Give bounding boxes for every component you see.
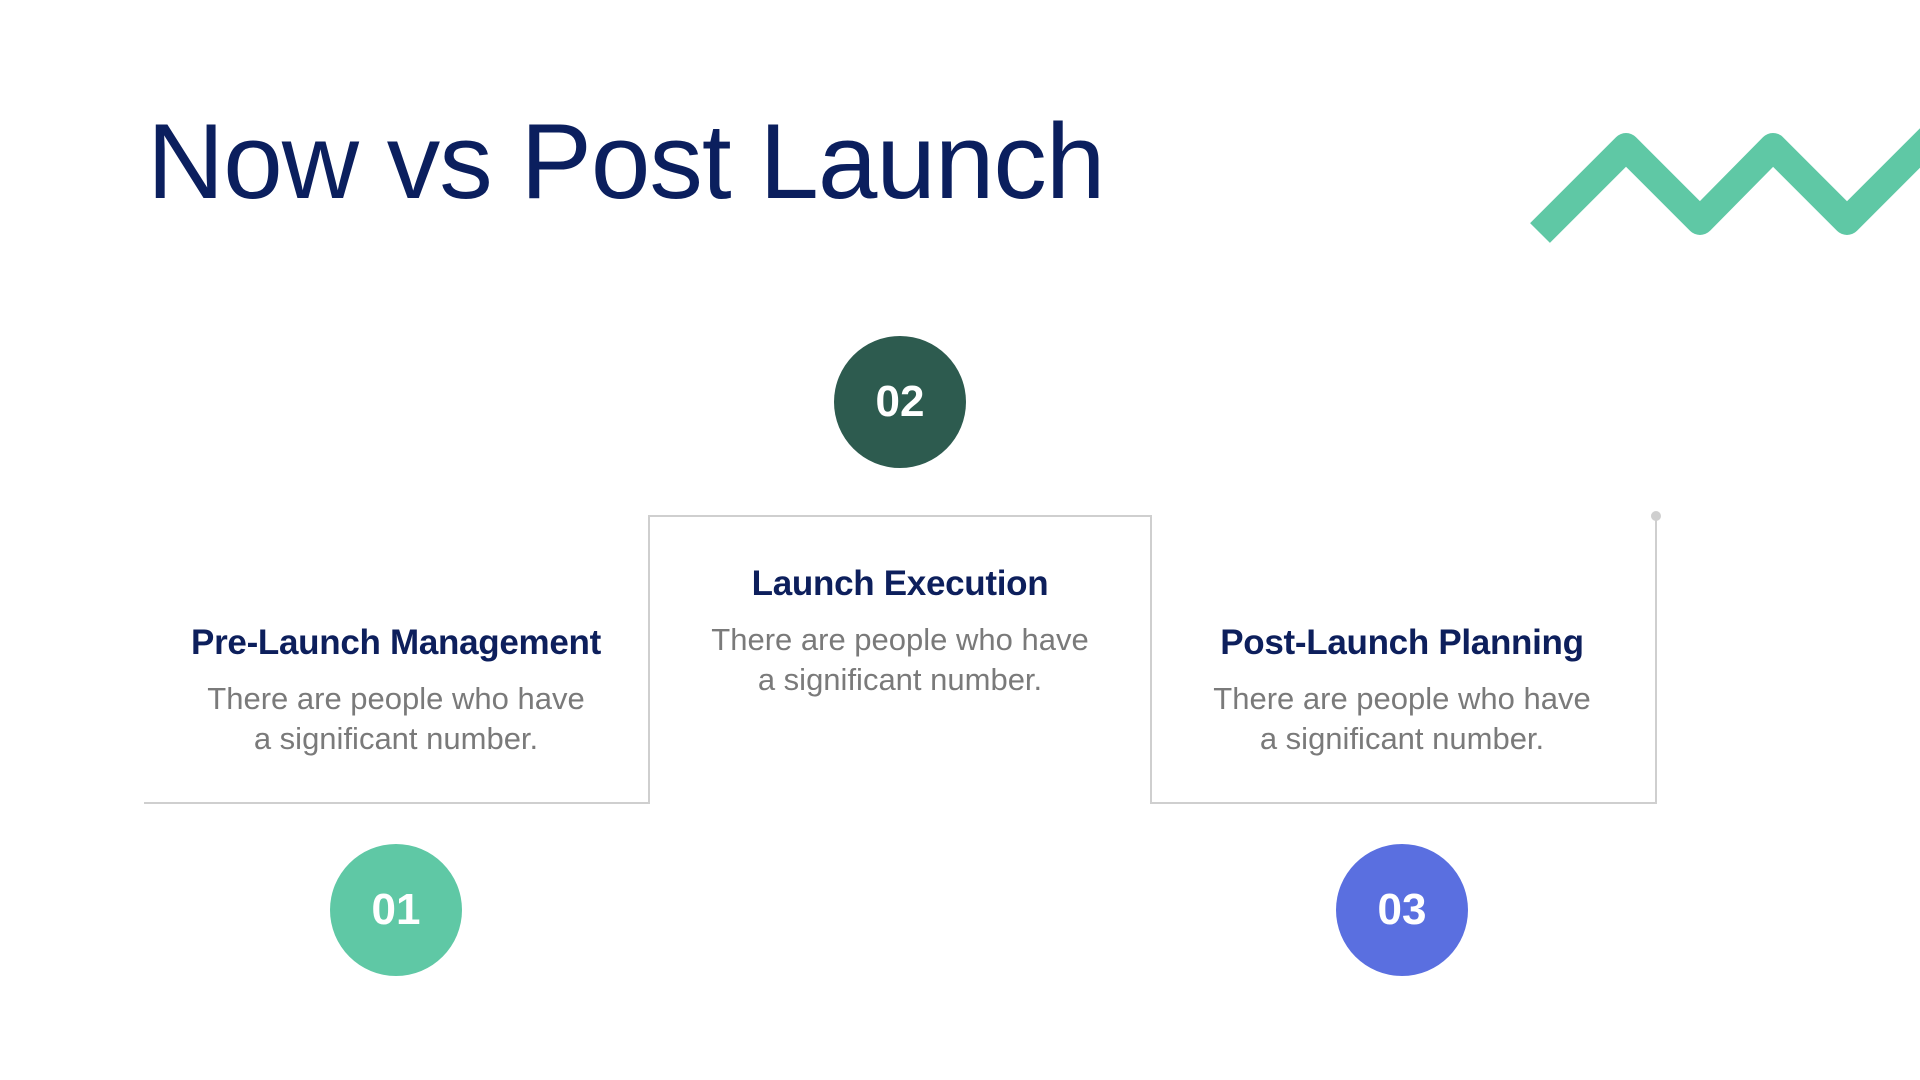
block: launch execution: a significant number. — [758, 662, 1042, 697]
circle 01 — [330, 844, 462, 976]
block: post-launch: a significant number. — [1260, 721, 1544, 756]
circle 03: 03 — [1378, 885, 1426, 934]
block: launch execution: Launch Execution — [752, 564, 1048, 603]
circle 03 — [1336, 844, 1468, 976]
circle 02 — [834, 336, 966, 468]
block: pre-launch: Pre-Launch Management — [191, 623, 601, 662]
block: pre-launch: a significant number. — [254, 721, 538, 756]
block: launch execution — [711, 564, 1089, 697]
zigzag decoration — [1530, 128, 1920, 243]
circle 01: 01 — [372, 885, 420, 934]
block: post-launch: There are people who have — [1213, 681, 1591, 716]
block: post-launch: Post-Launch Planning — [1220, 623, 1584, 662]
block: pre-launch: There are people who have — [207, 681, 585, 716]
block: post-launch — [1213, 623, 1591, 756]
block: pre-launch — [191, 623, 601, 756]
title: Now vs Post Launch — [147, 101, 1104, 221]
block: launch execution: There are people who have — [711, 622, 1089, 657]
circle 02: 02 — [876, 377, 924, 426]
